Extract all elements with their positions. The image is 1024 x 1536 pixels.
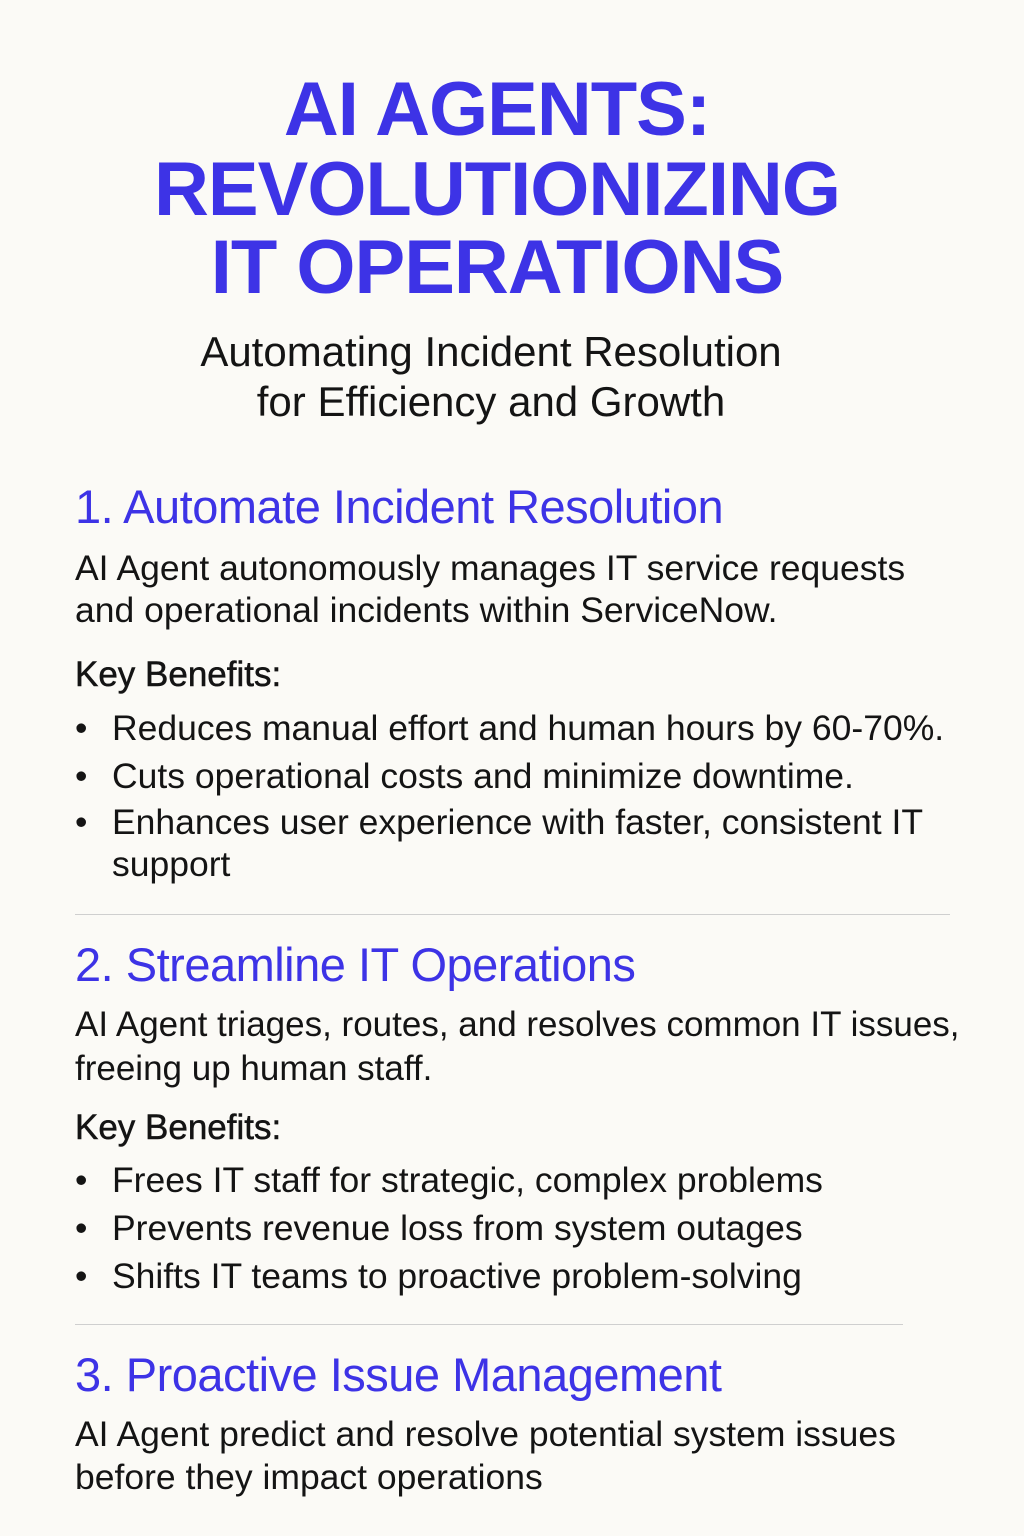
bullet list 2: Shifts IT teams to proactive problem-solving	[112, 1256, 802, 1296]
description: section 2: AI Agent triages, routes, and resolves common IT issues,	[75, 1005, 960, 1044]
bullet list 1: Enhances user experience with faster, consistent IT	[112, 802, 923, 842]
bullet list 2: •	[75, 1208, 87, 1248]
description: section 3: before they impact operations	[75, 1457, 543, 1497]
section 3	[75, 1348, 896, 1497]
key benefits label 2: Key Benefits:	[75, 1108, 281, 1147]
bullet list 1: Reduces manual effort and human hours by 60-70%.	[112, 708, 944, 748]
bullet list 1: •	[75, 708, 87, 748]
title	[154, 67, 840, 310]
description: section 1: AI Agent autonomously manages IT service requests	[75, 548, 905, 588]
description: section 3	[75, 1414, 896, 1497]
bullet list 2: Frees IT staff for strategic, complex problems	[112, 1160, 823, 1200]
bullet list 2: Prevents revenue loss from system outages	[112, 1208, 803, 1248]
description: section 1	[75, 548, 905, 630]
title: AI AGENTS:	[284, 67, 710, 152]
heading: section 2: 2. Streamline IT Operations	[75, 938, 635, 991]
bullet list 2	[75, 1160, 823, 1296]
title: IT OPERATIONS	[211, 225, 783, 310]
bullet list 2: •	[75, 1160, 87, 1200]
bullet list 1: Cuts operational costs and minimize downtime.	[112, 756, 854, 796]
subtitle: Automating Incident Resolution	[200, 328, 782, 375]
section 1	[75, 480, 944, 884]
bullet list 1: •	[75, 756, 87, 796]
title: REVOLUTIONIZING	[154, 147, 840, 232]
bullet list 1: support	[112, 844, 230, 884]
description: section 3: AI Agent predict and resolve potential system issues	[75, 1414, 896, 1454]
description: section 1: and operational incidents within ServiceNow.	[75, 590, 778, 630]
bullet list 2: •	[75, 1256, 87, 1296]
subtitle	[200, 328, 782, 425]
heading: section 1: 1. Automate Incident Resolution	[75, 480, 723, 533]
description: section 2	[75, 1005, 960, 1088]
subtitle: for Efficiency and Growth	[257, 378, 725, 425]
bullet list 1: •	[75, 802, 87, 842]
description: section 2: freeing up human staff.	[75, 1049, 432, 1088]
key benefits label 1: Key Benefits:	[75, 655, 281, 694]
heading: section 3: 3. Proactive Issue Management	[75, 1348, 721, 1401]
section 2	[75, 938, 960, 1296]
bullet list 1	[75, 708, 944, 884]
